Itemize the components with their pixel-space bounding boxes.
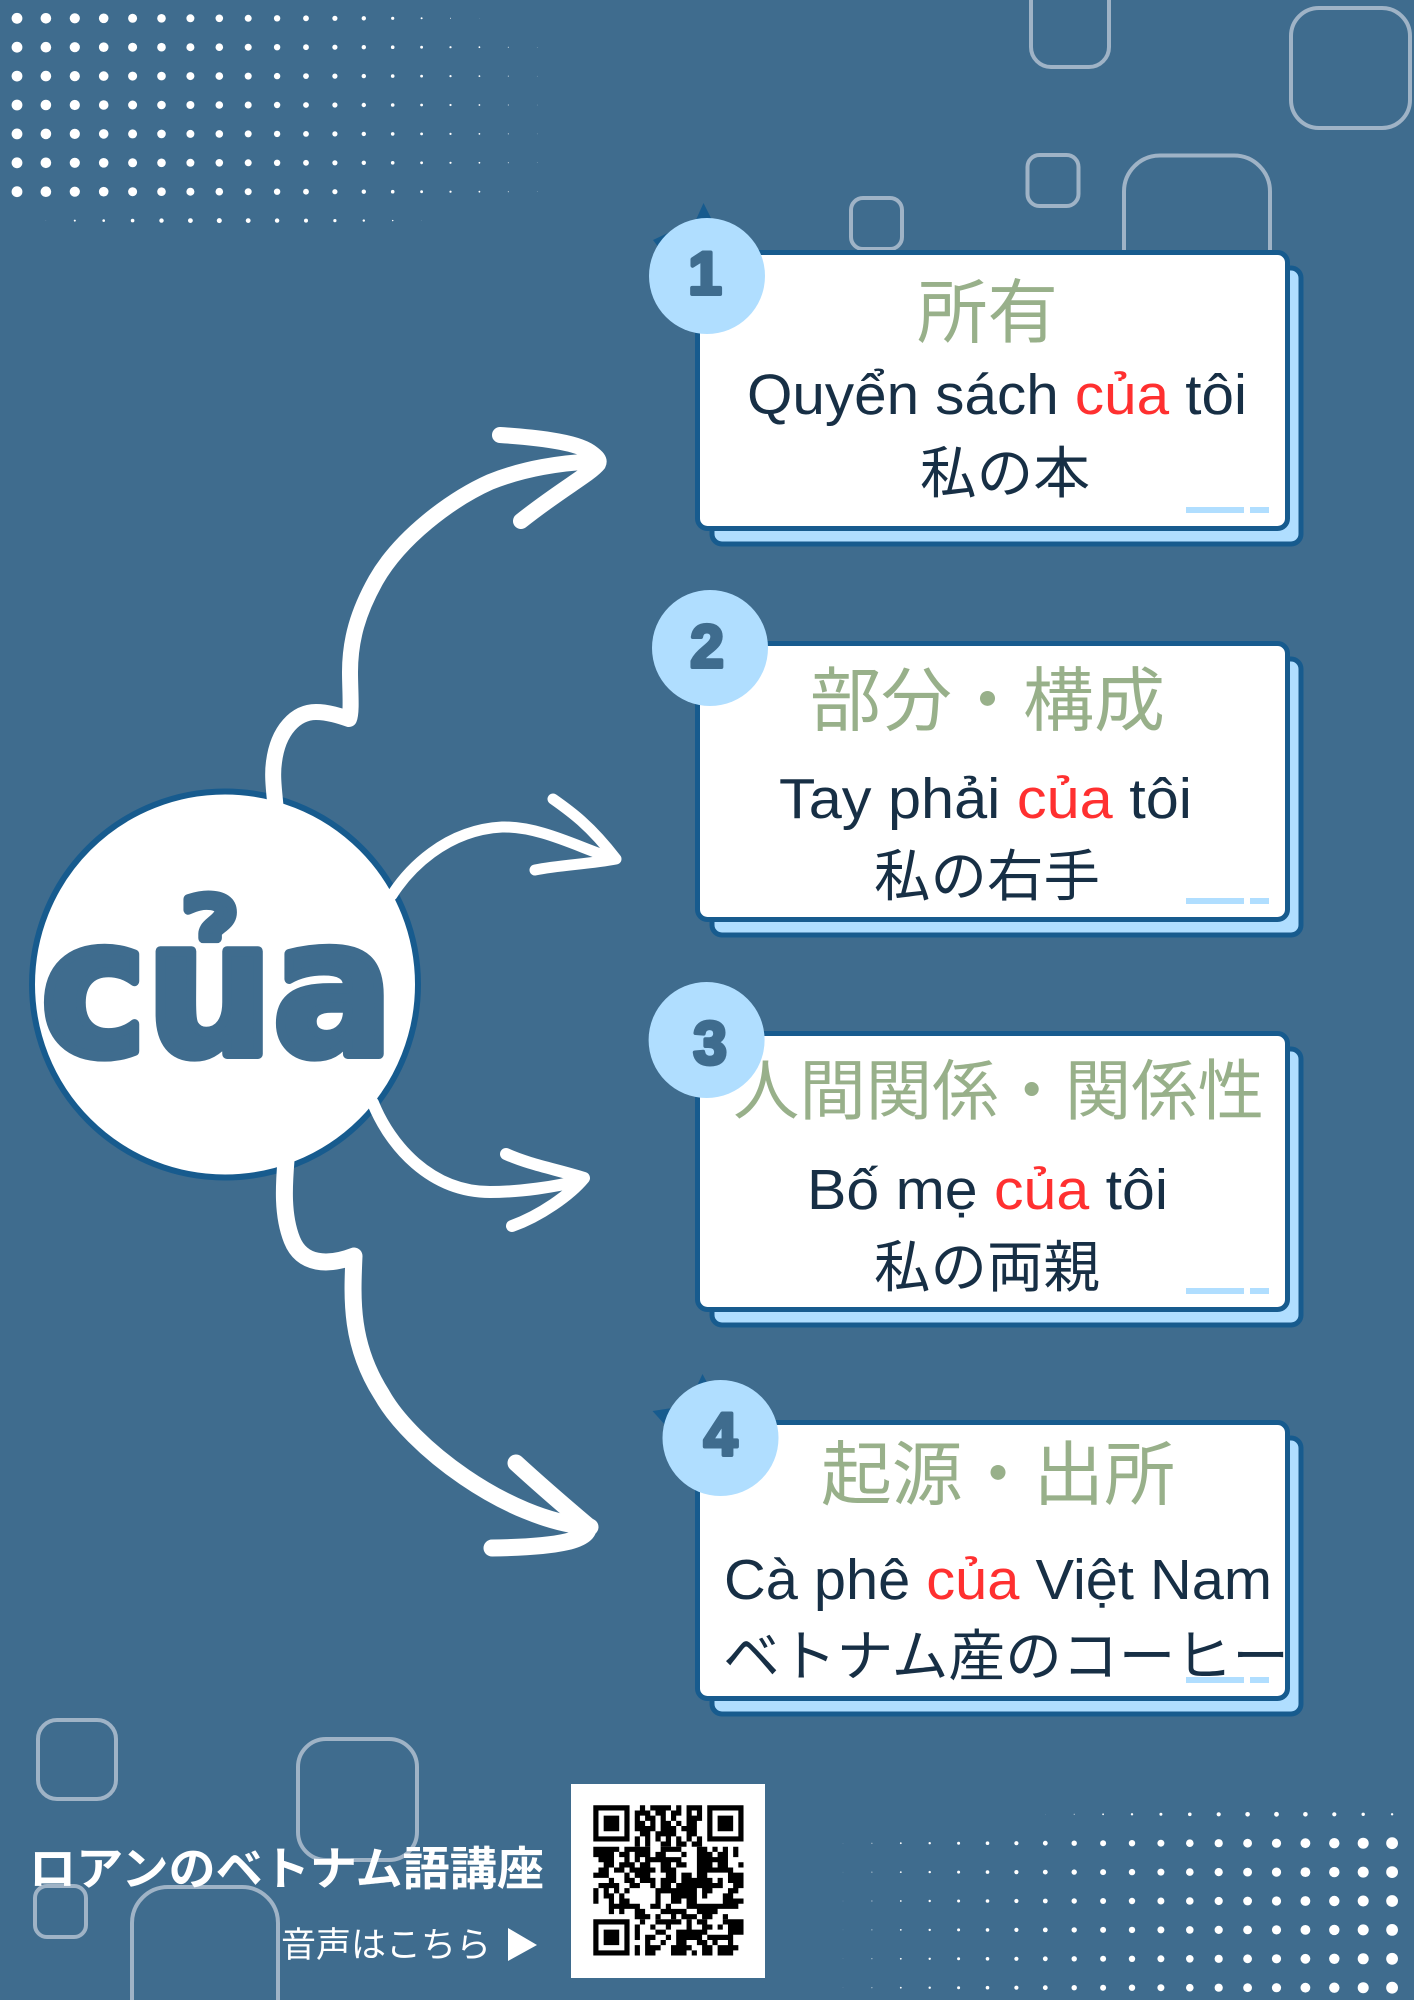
card 4: origin and source: Cà phê của Việt Nam <box>724 1548 1272 1612</box>
card 3: relationships <box>649 982 1301 1325</box>
card 4: origin and source <box>652 1374 1301 1714</box>
card 2: part and composition <box>652 590 1301 935</box>
card 1: possession: 所有 <box>917 274 1058 352</box>
arrow to card 1 <box>273 435 599 806</box>
card 3: relationships: Bố mẹ của tôi <box>807 1158 1168 1222</box>
central circle: của <box>32 792 418 1178</box>
QR code <box>571 1784 765 1978</box>
card 3: relationships: 人間関係・関係性 <box>733 1054 1264 1128</box>
decorative rounded squares: top right <box>851 0 1410 306</box>
card 3: relationships: 3 <box>693 1010 727 1077</box>
central word: của <box>41 880 393 1099</box>
card 1: possession <box>649 203 1301 544</box>
footer audio label: 音声はこちら <box>281 1926 491 1965</box>
arrow to card 2 <box>392 799 616 895</box>
halftone dots: bottom right <box>843 1812 1398 1994</box>
card 1: possession: Quyển sách của tôi <box>747 363 1247 427</box>
footer heading: ロアンのベトナム語講座 <box>29 1843 544 1895</box>
halftone dots: top left <box>12 13 537 223</box>
arrow to card 4 <box>284 1160 590 1548</box>
card 2: part and composition: 2 <box>690 613 724 680</box>
card 2: part and composition: 部分・構成 <box>810 662 1165 740</box>
card 4: origin and source: 起源・出所 <box>821 1436 1175 1514</box>
card 4: origin and source: ベトナム産のコーヒー <box>723 1625 1289 1688</box>
card 2: part and composition: 私の右手 <box>874 845 1100 908</box>
card 4: origin and source: 4 <box>704 1401 738 1468</box>
icon: play triangle <box>508 1928 537 1961</box>
decorative rounded squares: bottom left <box>35 1720 417 2000</box>
card 3: relationships: 私の両親 <box>874 1236 1100 1299</box>
card 1: possession: 1 <box>688 240 722 307</box>
card 2: part and composition: Tay phải của tôi <box>779 767 1192 831</box>
card 1: possession: 私の本 <box>920 442 1090 505</box>
arrow to card 3 <box>373 1103 584 1226</box>
